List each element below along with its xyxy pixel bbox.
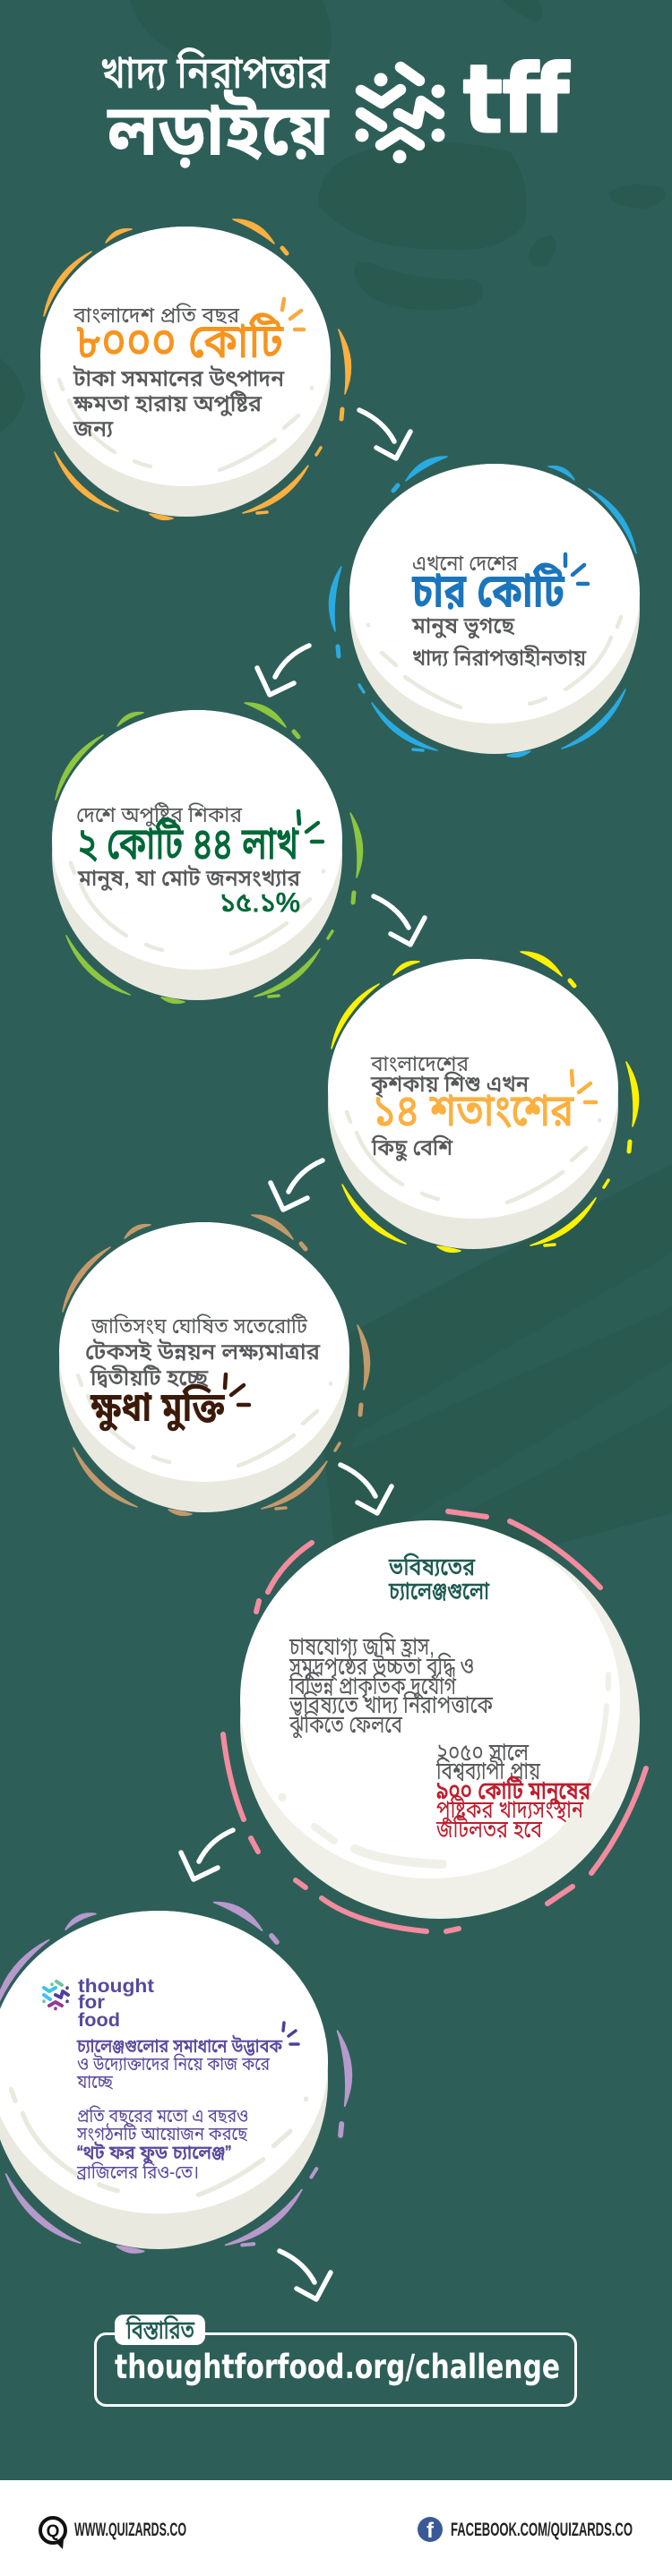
panel: egg 7 thought for food (0, 1903, 351, 2253)
title (100, 47, 331, 170)
panel: egg 6 future challenges (223, 1511, 646, 1931)
arrow 7 (280, 2251, 331, 2299)
arrow 5 (340, 1465, 392, 1513)
panel: link box (95, 2315, 575, 2405)
panel: egg 5: টেকসই উন্নয়ন লক্ষ্যমাত্রার (85, 1339, 321, 1365)
arrow 4 (271, 1160, 323, 1210)
panel: egg 1: জন্য (73, 416, 113, 441)
icon: facebook (418, 2517, 443, 2543)
title: খাদ্য নিরাপত্তার (100, 47, 330, 98)
wordmark (78, 1976, 154, 2031)
panel: egg 3: ১৫.১% (220, 888, 300, 918)
panel: egg 7 thought for food: সংগঠনটি আয়োজন করছে (76, 2123, 247, 2144)
panel: egg 5 (59, 1215, 370, 1515)
panel: egg 6 future challenges: পুষ্টিকর খাদ্যসংস্থান (436, 1795, 584, 1824)
panel: egg 7 thought for food: চ্যালেঞ্জগুলোর সমাধানে উদ্ভাবক (76, 2035, 283, 2057)
panel: egg 1: বাংলাদেশ প্রতি বছর (73, 303, 240, 328)
panel: egg 6 future challenges: ভবিষ্যতে খাদ্য নিরাপত্তাকে (289, 1690, 494, 1718)
tab label: বিস্তারিত (125, 2315, 194, 2345)
arrow 6 (181, 1830, 233, 1879)
panel: egg 1: ৮০০০ কোটি (76, 312, 284, 368)
footer (0, 2480, 672, 2576)
wordmark: tff (463, 45, 571, 154)
panel: egg 6 future challenges: বিশ্বব্যাপী প্রায় (435, 1757, 541, 1784)
panel: egg 6 future challenges: ২০৫০ সালে (436, 1739, 529, 1766)
panel: egg 6 future challenges: ঝুঁকিতে ফেলবে (289, 1710, 403, 1739)
icon: quizards (40, 2518, 65, 2549)
panel: egg 6 future challenges: চাষযোগ্য জমি হ্রাস, (289, 1632, 435, 1660)
panel: egg 3 (52, 703, 363, 1003)
panel: egg 3: দেশে অপুষ্টির শিকার (76, 802, 243, 827)
panel: egg 7 thought for food: প্রতি বছরের মতো এ বছরও (77, 2105, 248, 2127)
panel: egg 2: খাদ্য নিরাপত্তাহীনতায় (412, 645, 586, 671)
panel: egg 6 future challenges: বিভিন্ন প্রাকৃতিক দুর্যোগ (289, 1671, 456, 1701)
arrow 3 (374, 896, 425, 945)
icon: tff snowflake (355, 67, 444, 163)
panel: egg 3: মানুষ, যা মোট জনসংখ্যার (77, 865, 301, 891)
panel: egg 6 future challenges: জটিলতর হবে (435, 1815, 543, 1843)
title: লড়াইয়ে (107, 89, 331, 170)
panel: egg 6 future challenges: চ্যালেঞ্জগুলো (388, 1578, 490, 1605)
icon: facebook: f (426, 2519, 435, 2543)
panel: egg 4: বাংলাদেশের (370, 1052, 470, 1076)
panel: egg 7 thought for food: ও উদ্যোক্তাদের নিয়ে কাজ করে (77, 2053, 270, 2075)
icon: thought for food logo (44, 1981, 68, 2009)
panel: egg 1: ক্ষমতা হারায় অপুষ্টির (73, 390, 263, 416)
panel: egg 4: ১৪ শতাংশের (373, 1085, 574, 1135)
wordmark: for (78, 1992, 105, 2013)
panel: egg 4: কিছু বেশি (371, 1134, 453, 1161)
panel: egg 4: কৃশকায় শিশু এখন (370, 1071, 530, 1098)
logo: tff (355, 45, 571, 163)
panel: egg 5: ক্ষুধা মুক্তি (90, 1383, 225, 1432)
panel: egg 4 (328, 952, 639, 1252)
wordmark: thought (78, 1976, 154, 1997)
arrow 1 (359, 410, 410, 458)
panel: egg 1: টাকা সমমানের উৎপাদন (73, 365, 285, 391)
icon: quizards: Q (47, 2522, 59, 2541)
panel: egg 5: জাতিসংঘ ঘোষিত সতেরোটি (90, 1314, 308, 1339)
panel: egg 6 future challenges: ৯০০ কোটি মানুষের (436, 1776, 591, 1805)
panel: egg 1 (40, 219, 351, 519)
panel: egg 5: দ্বিতীয়টি হচ্ছে (90, 1365, 209, 1391)
panel: egg 2: চার কোটি (411, 563, 565, 618)
panel: egg 2: এখনো দেশের (412, 552, 519, 576)
panel: egg 2: মানুষ ভুগছে (411, 613, 515, 639)
wordmark: food (78, 2010, 120, 2031)
panel: egg 6 future challenges: ভবিষ্যতের (388, 1553, 476, 1580)
panel: egg 6 future challenges: সমুদ্রপৃষ্ঠের উচ্চতা বৃদ্ধি ও (289, 1651, 474, 1682)
panel: egg 7 thought for food: যাচ্ছে (76, 2072, 113, 2092)
panel: egg 7 thought for food: ব্রাজিলের রিও-তে। (76, 2161, 199, 2183)
website text: WWW.QUIZARDS.CO (74, 2520, 186, 2540)
panel: egg 7 thought for food: “থট ফর ফুড চ্যালেঞ্জ” (77, 2142, 231, 2163)
link text: thoughtforfood.org/challenge (115, 2348, 560, 2386)
panel: egg 2 (329, 457, 640, 757)
arrow 2 (257, 646, 309, 695)
panel: egg 3: ২ কোটি ৪৪ লাখ (77, 818, 299, 869)
